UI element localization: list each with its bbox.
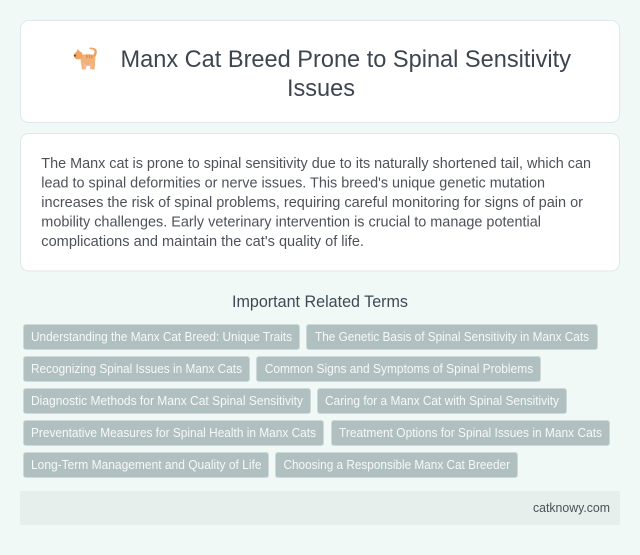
title: Manx Cat Breed Prone to Spinal Sensitivity	[120, 46, 571, 73]
footer: catknowy.com	[533, 500, 610, 515]
tag: signs and symptoms: Common Signs and Symptoms of Spinal Problems	[265, 362, 533, 376]
panel: description	[20, 134, 620, 271]
text block: description: complications and maintain the cat's quality of life.	[41, 233, 364, 250]
tag: long-term management	[24, 452, 268, 478]
heading: related terms: Important Related Terms	[232, 293, 408, 311]
text block: description: The Manx cat is prone to spinal sensitivity due to its naturally shortened tail, which can	[41, 155, 591, 172]
tag: recognizing issues	[24, 356, 250, 382]
tag: choosing a breeder	[276, 452, 518, 478]
tag: recognizing issues: Recognizing Spinal Issues in Manx Cats	[31, 362, 242, 376]
tag: genetic basis	[306, 324, 598, 350]
tag: choosing a breeder: Choosing a Responsible Manx Cat Breeder	[284, 458, 510, 472]
tag: genetic basis: The Genetic Basis of Spinal Sensitivity in Manx Cats	[315, 330, 589, 344]
title	[120, 46, 571, 102]
tag: treatment options	[332, 420, 610, 446]
tag: preventative measures	[24, 420, 324, 446]
tag: diagnostic methods: Diagnostic Methods for Manx Cat Spinal Sensitivity	[31, 394, 304, 408]
text block: description	[41, 155, 591, 250]
tag: diagnostic methods	[24, 388, 310, 414]
tag: unique traits	[24, 324, 300, 350]
tag: caring	[318, 388, 566, 414]
panel: title card	[20, 20, 620, 122]
text block: description: mobility challenges. Early veterinary intervention is crucial to manage potential	[41, 214, 541, 230]
tag: unique traits: Understanding the Manx Cat Breed: Unique Traits	[31, 330, 292, 344]
tag: treatment options: Treatment Options for Spinal Issues in Manx Cats	[339, 426, 602, 440]
tag: preventative measures: Preventative Measures for Spinal Health in Manx Cats	[31, 426, 316, 440]
tag: long-term management: Long-Term Management and Quality of Life	[31, 458, 262, 472]
tag: caring: Caring for a Manx Cat with Spinal Sensitivity	[325, 394, 560, 408]
text block: description: lead to spinal deformities or nerve issues. This breed's unique genetic mutation	[41, 174, 545, 192]
text block: description: increases the risk of spinal problems, requiring careful monitoring for signs of pain or	[41, 194, 583, 211]
footer	[20, 491, 620, 525]
tags: related terms	[24, 324, 610, 478]
title: Issues	[287, 75, 355, 102]
icon: cat	[74, 48, 97, 70]
tag: signs and symptoms	[256, 356, 540, 382]
